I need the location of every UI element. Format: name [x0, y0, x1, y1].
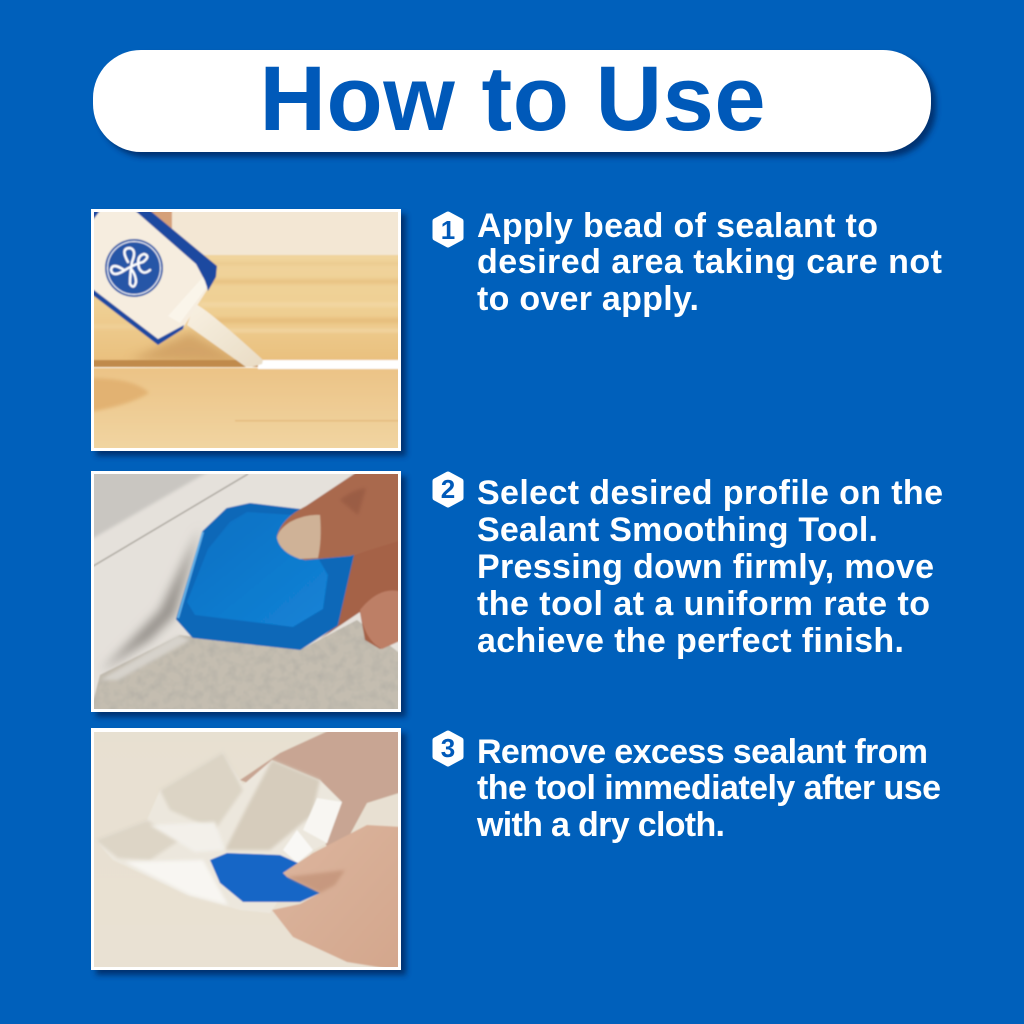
- carpet: [90, 620, 402, 713]
- blue smoothing tool: [177, 504, 353, 649]
- back hand: [240, 730, 402, 847]
- thumb: [277, 472, 402, 560]
- panel: photo 2, smoothing tool: [90, 470, 406, 717]
- step 1: [435, 207, 952, 318]
- step 2: [435, 474, 953, 660]
- step 3 text: Remove excess sealant from: [477, 733, 928, 771]
- fingers behind tool: [320, 539, 402, 649]
- icon: number 3 hexagon: 3: [441, 733, 455, 763]
- tube nozzle: [187, 304, 263, 367]
- step 3 text: with a dry cloth.: [476, 806, 725, 844]
- sealant tube: [94, 212, 208, 340]
- step 3: [435, 733, 950, 844]
- step 1 text: Apply bead of sealant to: [477, 207, 878, 245]
- panel: photo 3, wiping the tool: [90, 728, 406, 975]
- panel: photo 1, applying sealant: [90, 208, 406, 456]
- title banner: [93, 48, 936, 157]
- icon: number 2 hexagon: [435, 474, 461, 505]
- paper towel: [95, 752, 342, 913]
- step 2 text: Sealant Smoothing Tool.: [477, 511, 878, 549]
- title: How to Use: [260, 48, 766, 150]
- shadow beneath tube: [130, 332, 250, 365]
- icon: number 3 hexagon: [435, 733, 461, 764]
- icon: number 1 hexagon: 1: [441, 215, 455, 245]
- icon: number 2 hexagon: 2: [441, 474, 455, 504]
- step 1 text: desired area taking care not: [477, 243, 942, 281]
- hand behind tube: [150, 212, 173, 229]
- step 2 text: Select desired profile on the: [477, 474, 943, 512]
- shadow under tool: [100, 528, 200, 672]
- step 2 text: achieve the perfect finish.: [477, 622, 904, 660]
- bead of sealant: [258, 360, 402, 369]
- icon: number 1 hexagon: [435, 214, 461, 245]
- front hand: [272, 825, 402, 971]
- blue tool: [210, 853, 320, 902]
- step 1 text: to over apply.: [477, 280, 699, 318]
- thumbnail: [277, 515, 321, 559]
- step 2 text: the tool at a uniform rate to: [477, 585, 930, 623]
- step 3 text: the tool immediately after use: [477, 769, 941, 807]
- step 2 text: Pressing down firmly, move: [477, 548, 934, 586]
- icon: GE logo: [105, 239, 163, 297]
